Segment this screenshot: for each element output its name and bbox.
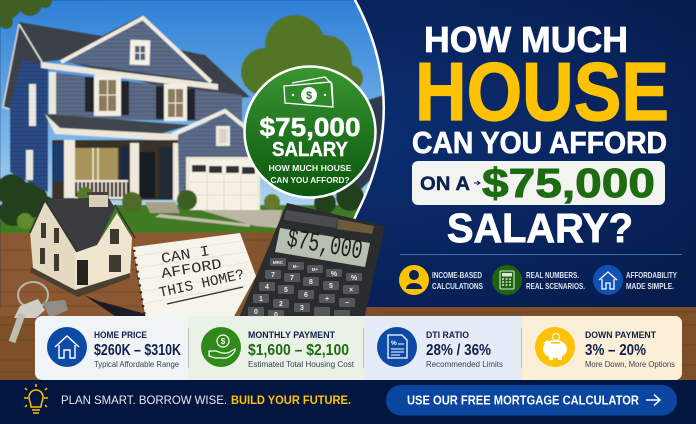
stat: monthly payment: $1,600 – $2,100 (248, 342, 349, 359)
handwritten note: THIS HOME? (158, 267, 246, 302)
stat: dti ratio: Recommended Limits (426, 360, 503, 369)
house: railing (75, 180, 128, 199)
calculator keys: 1 (259, 296, 263, 303)
badge salary label: SALARY (272, 139, 349, 161)
calculator keys: 0 (274, 312, 278, 319)
badge question: CAN YOU AFFORD? (270, 175, 350, 185)
title: salary: SALARY? (447, 205, 633, 251)
feature: real numbers: REAL NUMBERS. (526, 270, 579, 280)
house: columns (64, 140, 179, 201)
house: gable window (130, 40, 150, 65)
badge: $75,000 salary (244, 66, 376, 198)
tagline: PLAN SMART. BORROW WISE. (61, 393, 227, 407)
calculator (238, 203, 385, 320)
stat: dti ratio: % (391, 340, 397, 347)
house: side windows (26, 84, 36, 180)
wood table (0, 231, 275, 316)
salary pill: $75,000 (482, 160, 655, 206)
feature: affordability: AFFORDABILITY (626, 270, 677, 280)
stat: down payment: DOWN PAYMENT (585, 330, 657, 340)
stat: home price (47, 327, 181, 369)
pen (84, 295, 146, 316)
house behind the badge (352, 95, 382, 190)
stat: down payment: 3% – 20% (585, 342, 646, 359)
house: roof back (3, 15, 250, 108)
title block (412, 19, 669, 251)
calculator display (275, 228, 370, 267)
divider (400, 254, 682, 255)
calculator keys: % (351, 275, 358, 282)
feature: income-based calculations: CALCULATIONS (432, 281, 483, 291)
calculator keys: M+ (312, 267, 319, 272)
feature: real numbers (492, 265, 585, 295)
handwritten note (158, 246, 242, 296)
calculator keys: 4 (265, 284, 269, 291)
house: porch roof (45, 114, 190, 134)
calculator keys: 2 (279, 301, 283, 308)
house: porch interior (52, 140, 180, 200)
stat: dti ratio: 28% / 36% (426, 342, 491, 359)
stat: down payment (535, 327, 675, 369)
calculator keys: % (331, 271, 338, 278)
model house (30, 192, 135, 297)
calculator keys: 3 (300, 305, 304, 312)
title: how much: HOW MUCH (424, 19, 628, 60)
lawn (0, 204, 358, 234)
feature: affordability: MADE SIMPLE. (626, 281, 674, 291)
feature: real numbers: REAL SCENARIOS. (526, 281, 585, 291)
tagline (61, 393, 351, 407)
badge question (268, 163, 352, 185)
title: can you afford: CAN YOU AFFORD (412, 125, 667, 160)
tree top left (0, 0, 52, 29)
wood table strip (0, 307, 696, 381)
calculator: $75,000 (285, 225, 364, 267)
photo: house scene (0, 0, 400, 320)
footer band (0, 380, 696, 424)
house: door (120, 146, 129, 180)
stat: monthly payment: $ (221, 337, 226, 346)
stat: home price: HOME PRICE (94, 330, 147, 340)
house: upper gable (64, 20, 212, 82)
house: front shrubs (17, 187, 280, 229)
badge question: HOW MUCH HOUSE (268, 163, 352, 173)
salary pill (412, 160, 665, 206)
icon: arrow (646, 394, 660, 406)
stat: monthly payment: Estimated Total Housing Cost (248, 360, 355, 369)
calculator keys: × (349, 287, 353, 294)
calculator keys: 5 (284, 287, 288, 294)
stat: dti ratio (377, 327, 503, 369)
stat: monthly payment (201, 327, 355, 369)
feature row (399, 265, 677, 295)
calculator keys: 8 (309, 279, 313, 286)
background bushes (0, 174, 364, 226)
keys (12, 282, 68, 342)
badge amount: $75,000 (260, 112, 360, 142)
stat: down payment: More Down, More Options (585, 360, 675, 369)
stats card (35, 316, 682, 380)
handwritten note: AFFORD (160, 257, 223, 283)
calculator keys: 6 (304, 292, 308, 299)
house: garage section (177, 120, 248, 194)
calculator keys: 5 (329, 283, 333, 290)
feature: income-based calculations (399, 265, 483, 295)
icon: cash bills: $ (306, 90, 312, 102)
button: mortgage calculator (386, 385, 677, 416)
photo arc edge (345, 0, 384, 240)
feature: affordability (593, 265, 677, 295)
salary pill: ON A (420, 174, 470, 195)
house: second floor windows (85, 75, 195, 121)
calculator keys: M− (293, 264, 300, 269)
calculator keys: + (325, 296, 329, 303)
stat: home price: $260K – $310K (94, 342, 181, 359)
scene foreground (30, 192, 385, 320)
feature: income-based calculations: INCOME-BASED (432, 270, 482, 280)
tree right (240, 14, 364, 94)
handwritten note: CAN I (160, 244, 211, 268)
stat: home price: Typical Affordable Range (94, 360, 179, 369)
calculator keys (248, 258, 362, 319)
stat: dti ratio: DTI RATIO (426, 330, 469, 340)
house: second floor siding (50, 72, 242, 122)
tagline: BUILD YOUR FUTURE. (231, 393, 351, 407)
button: mortgage calculator: USE OUR FREE MORTGAGE CALCULATOR (407, 394, 639, 408)
stat: monthly payment: MONTHLY PAYMENT (248, 330, 336, 340)
right navy background panel (0, 0, 696, 308)
notebook (133, 233, 256, 320)
calculator keys: 0 (254, 309, 258, 316)
calculator keys: 7 (290, 275, 294, 282)
icon: light bulb (24, 384, 48, 413)
driveway (200, 210, 282, 228)
calculator keys: MRC (273, 260, 284, 265)
calculator keys: 7 (271, 272, 275, 279)
calculator keys: − (345, 300, 349, 307)
house: blue side wall (10, 60, 48, 192)
